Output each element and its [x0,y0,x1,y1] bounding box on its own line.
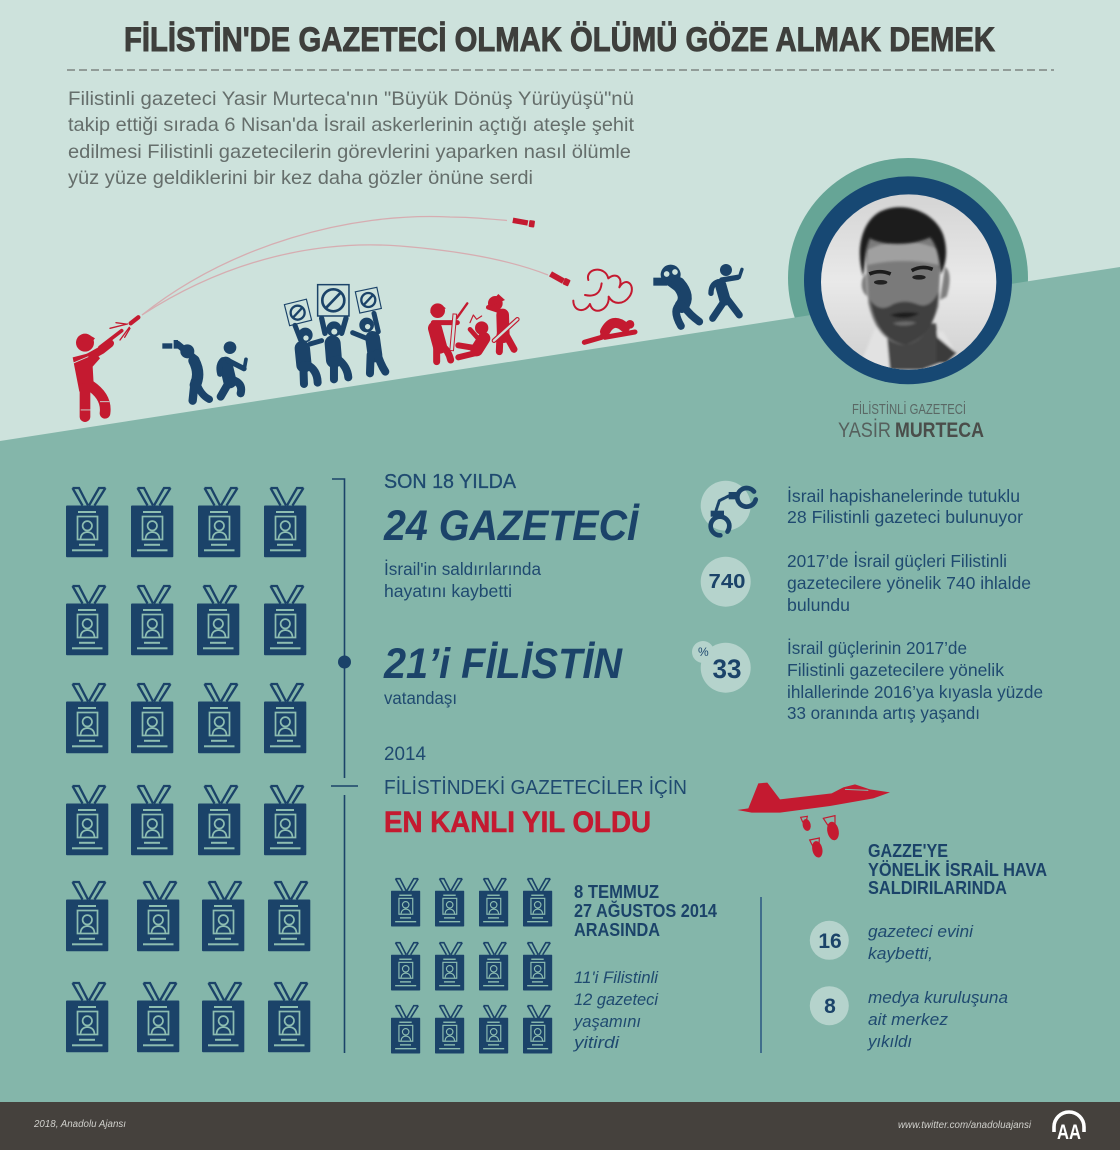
portrait caption: MURTECA [895,419,984,442]
portrait of Yasir Murteca [804,176,1012,384]
headline: 24 journalists: SON 18 YILDA [384,471,517,493]
heading: Israeli air strikes on Gaza: YÖNELİK İSRAİL HAVA [868,860,1047,880]
icon: journalist with camera and companion [162,340,246,401]
icon: fighter jet dropping bombs [737,783,890,859]
text: 8 July to 27 August 2014: ARASINDA [574,920,660,940]
intro text block: takip ettiği sırada 6 Nisan'da İsrail askerlerinin açtığı ateşle şehit [68,113,635,136]
headline: 2014 bloodiest year [384,744,687,839]
stat: imprisoned journalists with handcuffs icon: 28 Filistinli gazeteci bulunuyor [787,507,1023,527]
text: 8 July to 27 August 2014: 12 gazeteci [574,990,659,1009]
stat: 16 journalists lost homes: kaybetti, [868,944,933,963]
portrait outer ring [788,158,1028,398]
stat: 740 violations: 740 [708,571,746,593]
stat: 16 journalists lost homes: gazeteci evini [868,922,974,941]
stat: 8 media offices destroyed [810,986,1008,1051]
stat: 8 media offices destroyed: medya kuruluşuna [868,988,1008,1007]
icon: soldier firing [73,317,138,417]
portrait caption: FİLİSTİNLİ GAZETECİ [852,400,966,418]
stat: 16 journalists lost homes: 16 [818,930,842,953]
text: 8 July to 27 August 2014: 27 AĞUSTOS 2014 [574,900,717,921]
headline: 24 journalists [383,471,640,601]
icon: cameraman and companion [653,264,742,326]
stat: 33 percent increase: 33 oranında artış yaşandı [787,703,980,723]
intro text block: edilmesi Filistinli gazetecilerin görevlerini yaparken nasıl ölümle [68,141,631,163]
stat: 33 percent increase: ihlallerinde 2016’ya kıyasla yüzde [787,682,1043,702]
portrait caption [838,400,984,442]
headline: 21 Palestinians: vatandaşı [384,688,457,708]
footer credit: 2018, Anadolu Ajansı [33,1119,126,1130]
stat: imprisoned journalists with handcuffs icon: İsrail hapishanelerinde tutuklu [787,486,1020,506]
text: 8 July to 27 August 2014 [573,882,717,1052]
text: 8 July to 27 August 2014: yaşamını [573,1012,641,1031]
timeline [331,479,358,1053]
intro text block [68,88,635,189]
icon: soldiers beating a journalist [430,294,517,362]
stat: 33 percent increase: Filistinli gazetecilere yönelik [787,660,1004,680]
icon grid: 24 press badges [66,488,310,1052]
footer link: www.twitter.com/anadoluajansi [898,1120,1032,1131]
stat: 33 percent increase: İsrail güçlerinin 2017’de [787,638,967,658]
headline: 2014 bloodiest year: EN KANLI YIL OLDU [384,806,651,839]
stat: 8 media offices destroyed: yıkıldı [867,1032,912,1051]
stat: 740 violations: bulundu [787,595,850,615]
background: lower slanted teal area [0,267,1120,1102]
heading: Israeli air strikes on Gaza: SALDIRILARINDA [868,878,1007,898]
stat: 8 media offices destroyed: 8 [824,995,836,1018]
stat: imprisoned journalists with handcuffs icon [701,481,1023,536]
heading: Israeli air strikes on Gaza: GAZZE'YE [868,841,948,861]
small icon grid: 12 press badges [391,879,552,1053]
footer bar [0,1102,1120,1150]
icon: protesters with signs [284,285,385,384]
text: 8 July to 27 August 2014: yitirdi [573,1033,620,1052]
headline: 24 journalists: hayatını kaybetti [384,581,512,601]
intro text block: yüz yüze geldiklerini bir kez daha gözler önüne serdi [68,167,533,189]
stat: 740 violations: gazetecilere yönelik 740 ihlalde [787,573,1031,593]
projectile trajectories [142,217,548,315]
headline: 21 Palestinians: 21’i FİLİSTİN [383,640,623,688]
headline: 24 journalists: İsrail'in saldırılarında [384,559,541,579]
text: 8 July to 27 August 2014: 8 TEMMUZ [574,882,659,902]
headline: 24 journalists: 24 GAZETECİ [383,502,640,550]
stat: 33 percent increase [692,638,1043,723]
headline: 21 Palestinians [383,640,623,708]
icon: gas canister two [549,271,571,287]
stat: 33 percent increase: % [698,645,709,659]
title: FİLİSTİN'DE GAZETECİ OLMAK ÖLÜMÜ GÖZE ALMAK DEMEK [124,21,995,59]
icon: tear gas cloud and fallen person [573,270,635,342]
logo: Anadolu Agency [1054,1112,1084,1144]
portrait caption: YASİR [838,419,891,442]
heading: Israeli air strikes on Gaza [868,841,1047,898]
headline: 2014 bloodiest year: 2014 [384,744,426,765]
stat: 740 violations [701,551,1031,615]
stat: 8 media offices destroyed: ait merkez [868,1010,948,1029]
stat: 16 journalists lost homes [810,921,974,963]
logo: Anadolu Agency: AA [1057,1121,1081,1144]
intro text block: Filistinli gazeteci Yasir Murteca'nın "Büyük Dönüş Yürüyüşü"nü [68,88,634,110]
text: 8 July to 27 August 2014: 11'i Filistinli [574,968,659,987]
stat: 33 percent increase: 33 [712,654,742,684]
icon: gas canister one [512,218,535,228]
headline: 2014 bloodiest year: FİLİSTİNDEKİ GAZETECİLER İÇİN [384,776,687,799]
stat: 740 violations: 2017’de İsrail güçleri Filistinli [787,551,1007,571]
